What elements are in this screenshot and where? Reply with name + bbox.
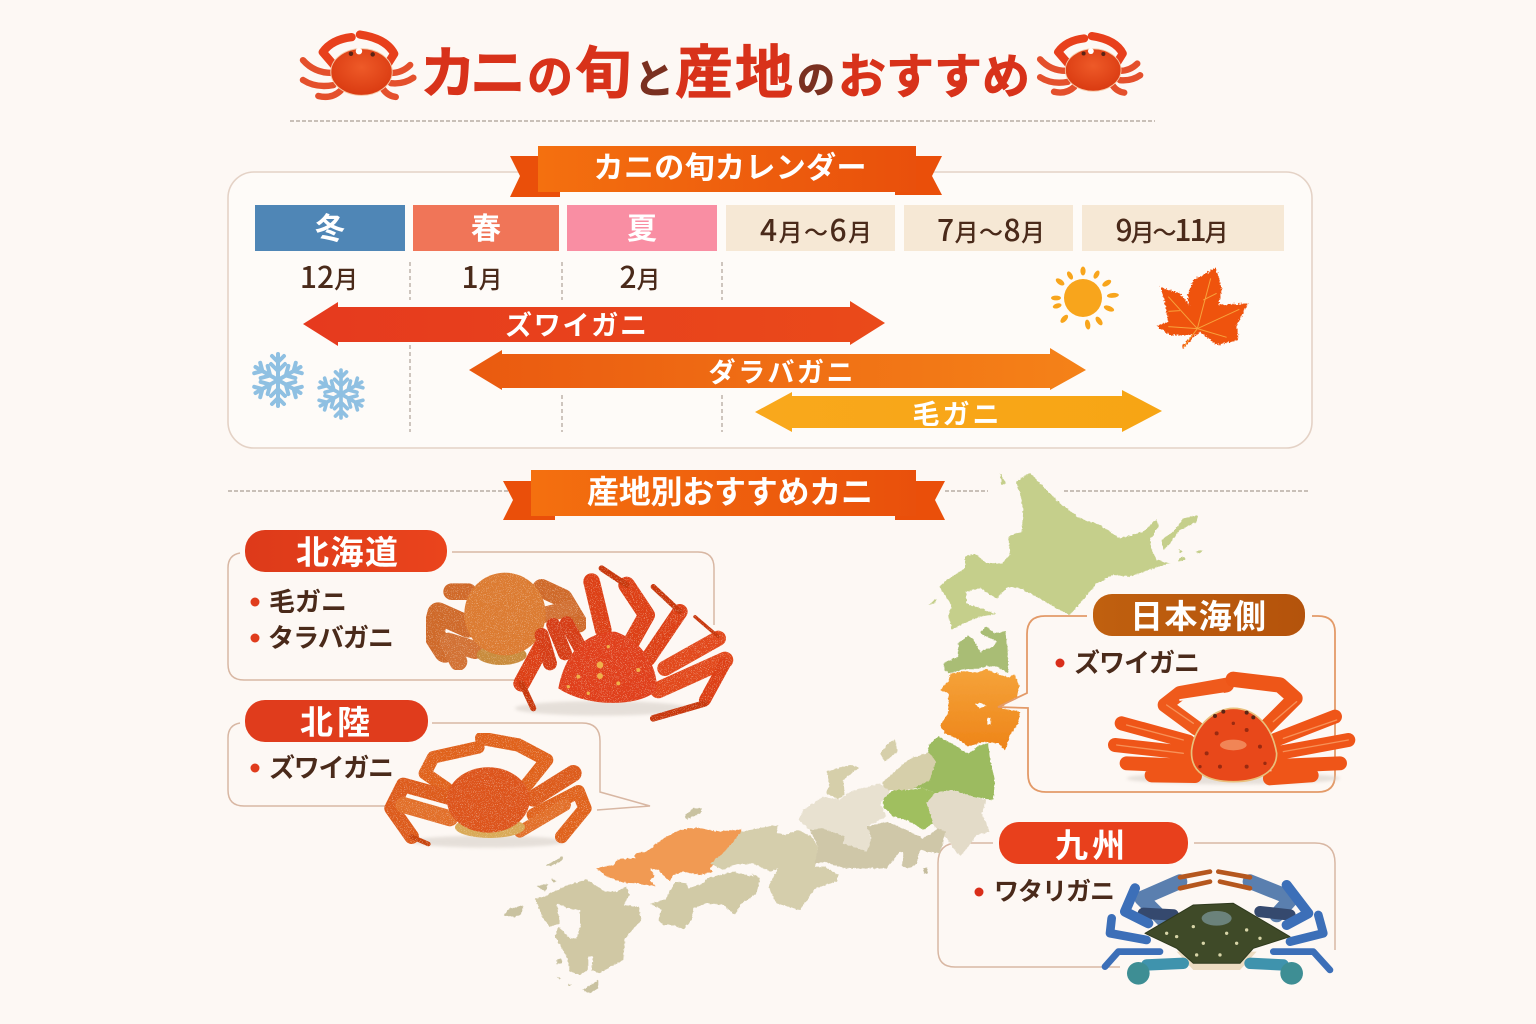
header cell: September to November	[1082, 205, 1284, 251]
map region: Kanto	[927, 790, 990, 857]
illustration: Hokuriku zuwai crab	[392, 738, 585, 848]
map of Japan: south and west	[503, 739, 946, 993]
arrow: zuwai crab season	[303, 301, 885, 346]
crab list: Hokuriku: ズワイガニ	[269, 753, 394, 783]
title: の	[797, 60, 835, 102]
arrow: taraba crab season: ダラバガニ	[708, 357, 854, 388]
map region: Kansai	[710, 825, 838, 910]
header cell: spring	[413, 205, 559, 251]
map region: Chubu	[798, 783, 890, 852]
illustration: hairy crab	[433, 573, 578, 665]
map region: Kyushu	[535, 879, 642, 975]
arrow: hairy crab season: 毛ガニ	[912, 400, 1000, 430]
map region: highlighted Tohoku	[940, 669, 1020, 751]
arrow: zuwai crab season: ズワイガニ	[505, 310, 647, 341]
title: の	[527, 51, 573, 103]
map region: Fukushima and Niigata green	[910, 737, 995, 800]
header cell: July to August	[904, 205, 1073, 251]
header cell: summer: 夏	[627, 213, 657, 246]
arrow: taraba crab season	[469, 348, 1086, 390]
crab list: Hokkaido: タラバガニ	[268, 623, 394, 653]
title: カニ	[420, 42, 526, 105]
region label: Hokkaido	[245, 530, 447, 572]
title: おすすめ	[838, 51, 1030, 104]
map region: Nagano green	[883, 788, 935, 830]
map region: Shikoku	[650, 872, 760, 929]
map of Japan: north	[883, 473, 1203, 857]
map region: small islands	[503, 808, 702, 993]
header cell: April to June: 4月〜6月	[760, 206, 872, 250]
panel: Sea of Japan side	[998, 594, 1348, 792]
month label: January: 1月	[461, 253, 503, 297]
panel: Hokuriku	[228, 700, 650, 848]
header cell: summer	[567, 205, 717, 251]
arrow: hairy crab season	[755, 390, 1162, 432]
icon: snowflake small	[317, 370, 365, 418]
header cell: spring: 春	[471, 213, 501, 246]
title: 旬	[575, 42, 631, 105]
title	[420, 41, 1030, 106]
map region: northern Tohoku	[943, 627, 1008, 673]
crab list: Sea of Japan side: ズワイガニ	[1074, 648, 1200, 678]
header cell: winter	[255, 205, 405, 251]
month label: December: 12月	[300, 253, 358, 297]
region label: Hokuriku: 北陸	[300, 704, 370, 741]
panel outline: Kyushu	[938, 843, 1335, 967]
region label: Sea of Japan side	[1093, 594, 1305, 636]
header cell: July to August: 7月〜8月	[937, 206, 1045, 250]
map region: Hokuriku and Sado	[827, 739, 936, 799]
title: と	[634, 58, 674, 102]
crab list: Hokkaido	[250, 587, 394, 653]
icon: maple leaf	[1157, 267, 1248, 349]
region label: Kyushu: 九州	[1055, 827, 1125, 864]
title: 産地	[675, 41, 793, 106]
map region: Tokai	[810, 822, 946, 868]
region label: Hokkaido: 北海道	[296, 534, 398, 571]
month label: February: 2月	[619, 253, 661, 297]
header cell: April to June	[726, 205, 895, 251]
map region: Hokkaido	[928, 473, 1203, 630]
region label: Sea of Japan side: 日本海側	[1130, 598, 1266, 635]
ribbon: regional heading: 産地別おすすめカニ	[587, 474, 873, 510]
region label: Hokuriku	[245, 700, 428, 742]
crab list: Hokkaido: 毛ガニ	[269, 587, 347, 617]
icon: snowflake large	[252, 354, 304, 406]
illustration: king crab	[515, 568, 725, 718]
crab list: Kyushu: ワタリガニ	[994, 878, 1115, 906]
ribbon: regional heading	[503, 470, 945, 520]
header cell: September to November: 9月〜11月	[1116, 206, 1228, 250]
map region: Chugoku	[597, 827, 742, 886]
ribbon: calendar heading: カニの旬カレンダー	[594, 151, 866, 185]
panel: Kyushu	[974, 822, 1330, 985]
icon: title crab right	[1040, 36, 1140, 93]
illustration: blue swimming crab	[1105, 872, 1330, 985]
region label: Kyushu	[999, 822, 1188, 864]
panel: season calendar	[228, 172, 1312, 448]
icon: title crab left	[303, 35, 413, 97]
illustration: snow crab	[1115, 679, 1348, 784]
header cell: winter: 冬	[315, 213, 345, 246]
ribbon: calendar heading	[510, 146, 942, 197]
icon: sun	[1051, 266, 1119, 330]
panel: Hokkaido	[228, 530, 725, 718]
